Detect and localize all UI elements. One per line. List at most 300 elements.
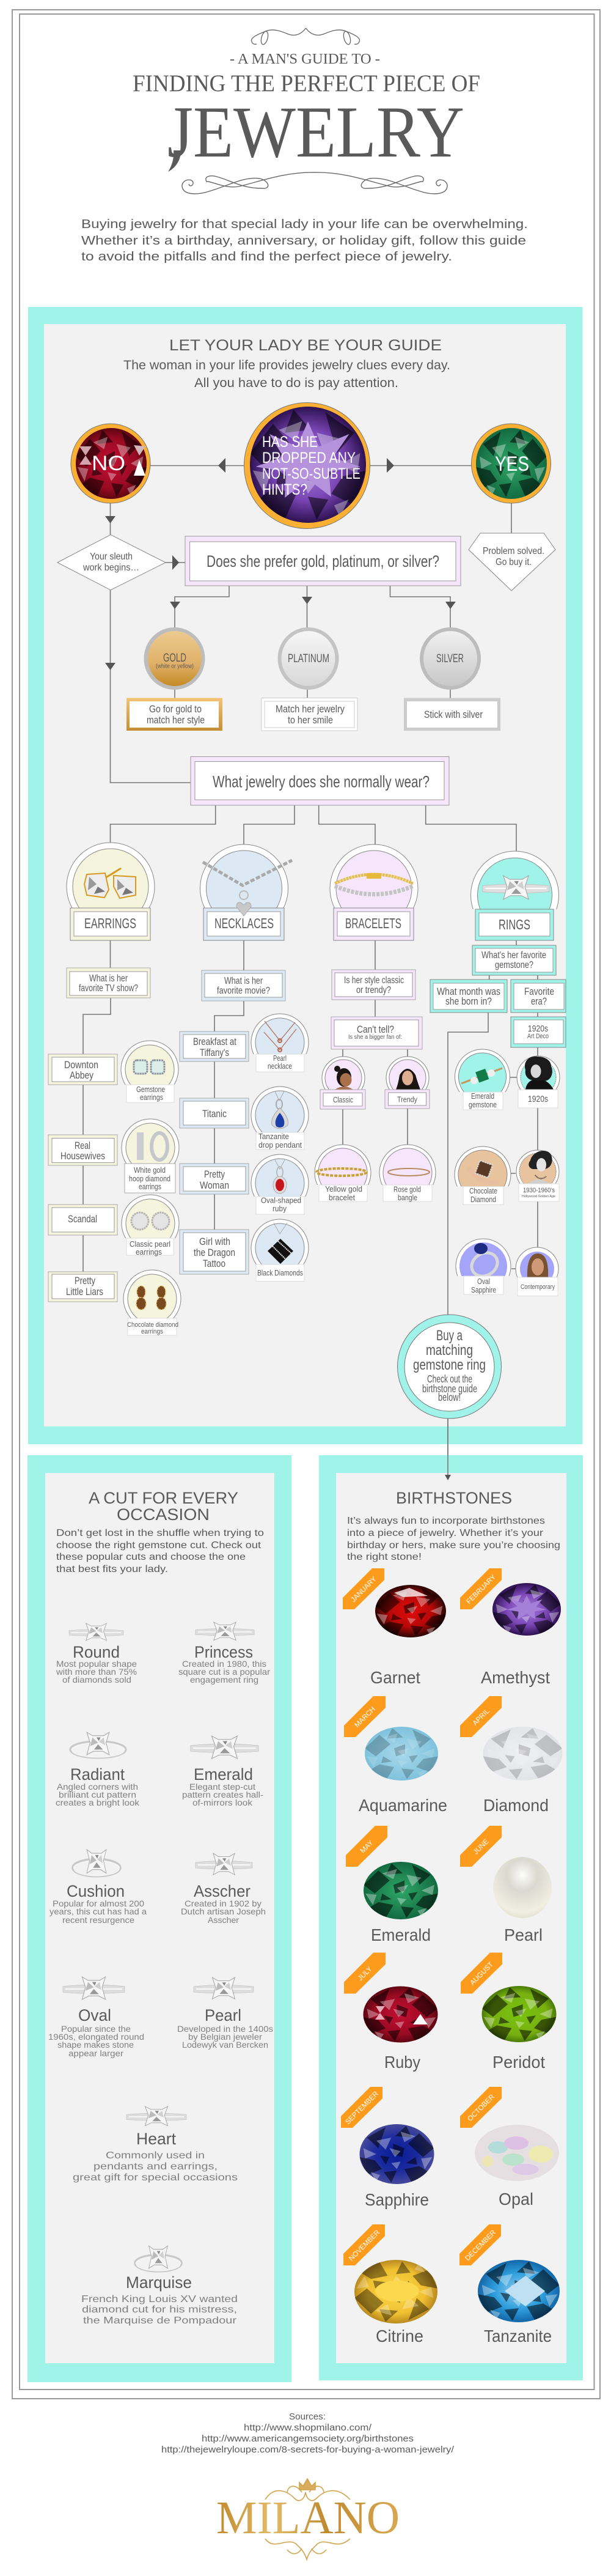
product: black diamonds <box>250 1219 310 1282</box>
month tag: JANUARY <box>350 1575 378 1604</box>
product: gemstone earrings <box>120 1041 180 1102</box>
question box: metal preference <box>185 536 461 586</box>
arrow: sleuth to question <box>172 555 179 570</box>
connector lines top flow <box>83 466 538 1477</box>
birthstone: tanzanite <box>459 2224 560 2345</box>
month tag <box>460 1696 502 1737</box>
cut: radiant: Angled corners with <box>57 1782 138 1792</box>
product: rose gold bangle: Rose gold <box>393 1185 421 1194</box>
option: platinum <box>262 627 357 731</box>
arrow: platinum <box>302 597 312 604</box>
arrow: main flow down <box>105 663 115 670</box>
category: earrings: EARRINGS <box>84 915 136 931</box>
birthstone: aquamarine <box>344 1696 447 1815</box>
product: chocolate earrings <box>122 1270 182 1335</box>
section heading: LET YOUR LADY BE YOUR GUIDE <box>169 337 442 354</box>
portrait: trendy <box>385 1057 430 1109</box>
category: necklaces: NECKLACES <box>214 915 274 931</box>
option: silver: Stick with silver <box>424 709 483 720</box>
cut: heart: Heart <box>136 2130 176 2148</box>
cut: pearl: Developed in the 1400s <box>177 2024 273 2034</box>
cut: radiant <box>56 1732 140 1807</box>
birthstones intro: birthday or hers, make sure you’re choosing <box>347 1540 560 1551</box>
cut: pearl: by Belgian jeweler <box>188 2032 262 2042</box>
product: chocolate earrings: Chocolate diamond <box>127 1321 178 1329</box>
cut: princess: Princess <box>194 1643 253 1661</box>
product: pearl earrings <box>120 1195 180 1257</box>
birthstones intro <box>347 1516 560 1562</box>
icon: emerald ring <box>461 1068 502 1084</box>
category: bracelets: BRACELETS <box>345 915 401 931</box>
answer: girl with the dragon tattoo: Tattoo <box>203 1258 225 1269</box>
cut: heart: pendants and earrings, <box>93 2161 218 2172</box>
icon: gold bracelet <box>316 1168 367 1176</box>
answer: downton abbey: Abbey <box>70 1069 93 1081</box>
month tag: JULY <box>357 1965 374 1982</box>
cut: marquise: French King Louis XV wanted <box>81 2294 238 2305</box>
product: chocolate diamond ring: Diamond <box>470 1195 496 1204</box>
month tag: AUGUST <box>469 1961 495 1987</box>
big circle: buy a matching gemstone ring: gemstone ring <box>413 1357 486 1373</box>
cut: heart <box>73 2106 238 2183</box>
big circle: buy a matching gemstone ring: matching <box>426 1342 473 1359</box>
answer: pretty little liars <box>48 1272 117 1302</box>
panel: birthstones <box>319 1455 583 2380</box>
portrait: 1920s <box>516 1056 561 1108</box>
option: platinum: PLATINUM <box>288 652 329 665</box>
question: cant tell <box>331 1017 422 1049</box>
top ornament <box>252 28 360 45</box>
section subtext: The woman in your life provides jewelry clues every day. <box>123 358 450 372</box>
big circle: buy a matching gemstone ring <box>397 1315 501 1419</box>
icon: 1920s woman <box>525 1057 554 1090</box>
intro paragraph: Buying jewelry for that special lady in your life can be overwhelming. <box>81 217 528 231</box>
cut intro: these popular cuts and choose the one <box>56 1552 246 1562</box>
cut: marquise: the Marquise de Pompadour <box>83 2316 237 2326</box>
question: birth month: What month was <box>437 986 500 997</box>
answer: girl with the dragon tattoo: the Dragon <box>194 1247 235 1258</box>
circle: hints question: HAS SHE <box>262 434 318 451</box>
cut heading: OCCASION <box>117 1505 210 1524</box>
panel: a cut for every occasion <box>27 1455 291 2382</box>
portrait: hollywood golden age <box>515 1150 560 1201</box>
crown flourish <box>265 2479 350 2501</box>
intro paragraph: to avoid the pitfalls and find the perfect piece of jewelry. <box>81 249 452 264</box>
cut: princess <box>178 1622 270 1685</box>
lower flourish <box>265 2539 350 2559</box>
cut: marquise: diamond cut for his mistress, <box>82 2305 237 2315</box>
cut intro: Don’t get lost in the shuffle when trying to <box>56 1528 264 1538</box>
product: yellow gold bracelet: bracelet <box>329 1194 355 1202</box>
icon: contemporary woman <box>527 1253 548 1277</box>
portrait: contemporary <box>514 1247 560 1296</box>
cut: emerald: Elegant step-cut <box>189 1782 255 1792</box>
cut: oval: shape makes stone <box>57 2040 134 2050</box>
cut: cushion: Popular for almost 200 <box>53 1899 144 1908</box>
circle: hints question: NOT-SO-SUBTLE <box>262 465 360 482</box>
product: yellow gold bracelet <box>313 1145 372 1202</box>
gem shape: problem solved: Problem solved. <box>483 546 544 556</box>
portrait: hollywood golden age: Hollywood Golden Age <box>522 1195 555 1198</box>
circle: no <box>71 424 150 503</box>
icon: hoops <box>137 1132 167 1160</box>
cut: asscher: Created in 1902 by <box>185 1899 262 1908</box>
birthstone: emerald: Emerald <box>371 1925 431 1944</box>
question: style: Is her style classic <box>344 975 404 986</box>
arrow: silver <box>445 602 456 609</box>
product: oval sapphire ring: Oval <box>477 1277 490 1286</box>
cut: oval: appear larger <box>68 2048 123 2058</box>
arrow: to yes <box>387 458 394 473</box>
icon: heart necklace <box>203 860 292 916</box>
birthstone: diamond: Diamond <box>483 1796 549 1815</box>
answer: pretty woman <box>180 1164 249 1194</box>
cut: princess: Created in 1980, this <box>182 1659 266 1669</box>
question: style <box>332 970 415 1000</box>
cut: cushion <box>49 1850 147 1925</box>
circle: no: NO <box>92 452 125 475</box>
option: silver: SILVER <box>436 652 464 665</box>
cut: heart: great gift for special occasions <box>73 2172 238 2183</box>
circle: hints question: HINTS? <box>262 481 307 498</box>
answer: girl with the dragon tattoo: Girl with <box>199 1236 230 1247</box>
question box: metal preference: Does she prefer gold, platinum, or silver? <box>207 552 439 570</box>
birthstone: pearl: Pearl <box>504 1925 543 1944</box>
circle: hints question: DROPPED ANY <box>262 449 356 467</box>
sources <box>161 2412 455 2455</box>
answer: breakfast at tiffanys <box>180 1032 249 1061</box>
option: gold: GOLD <box>163 652 186 665</box>
flow line into birthstones panel <box>445 1419 451 1480</box>
cut: radiant: brilliant cut pattern <box>59 1790 136 1799</box>
birthstone: amethyst <box>460 1568 561 1687</box>
birthstones intro: the right stone! <box>347 1552 422 1562</box>
category: earrings <box>64 843 157 940</box>
question: movie: favorite movie? <box>217 986 270 996</box>
product: emerald ring: Emerald <box>471 1092 494 1101</box>
cut: heart: Commonly used in <box>106 2150 205 2161</box>
answer: downton abbey: Downton <box>64 1059 98 1071</box>
cut: asscher <box>181 1853 266 1925</box>
question box: what jewelry: What jewelry does she normally wear? <box>213 773 430 791</box>
icon: woman with long hair <box>396 1069 420 1090</box>
month tag: OCTOBER <box>466 2093 496 2123</box>
icon: ruby pendant <box>273 1160 287 1194</box>
portrait: classic <box>320 1057 366 1109</box>
big circle: buy a matching gemstone ring: below! <box>438 1391 461 1403</box>
question: gemstone: What's her favorite <box>481 950 546 961</box>
question: movie <box>202 970 285 1001</box>
cut: emerald: of-mirrors look <box>192 1798 253 1807</box>
icon: bangle <box>388 1168 430 1176</box>
icon: 1950s woman <box>528 1151 552 1184</box>
portrait: trendy: Trendy <box>397 1094 417 1104</box>
product: pearl earrings: earrings <box>136 1248 162 1257</box>
birthstone: garnet: Garnet <box>370 1668 420 1687</box>
birthstone: ruby <box>344 1953 437 2072</box>
birthstone: diamond <box>460 1696 562 1815</box>
month tag <box>459 2224 501 2265</box>
cut: cushion: Cushion <box>67 1882 125 1900</box>
portrait: 1920s: 1920s <box>528 1094 548 1104</box>
cut: emerald <box>182 1736 263 1807</box>
birthstone: garnet <box>343 1568 446 1687</box>
cut: pearl: Pearl <box>205 2006 241 2024</box>
diamond: sleuth work: Your sleuth <box>90 552 133 562</box>
option: gold: match her style <box>147 714 205 726</box>
month tag <box>460 1568 502 1609</box>
cut: asscher: Asscher <box>194 1882 251 1900</box>
cut: princess: engagement ring <box>190 1675 258 1685</box>
icon: pearl studs <box>131 1212 169 1230</box>
month tag <box>344 1696 386 1737</box>
question: birth month: she born in? <box>445 995 492 1007</box>
icon: solitaire ring <box>483 876 549 899</box>
product: pearl earrings: Classic pearl <box>130 1240 170 1249</box>
product: tanzanite pendant: Tanzanite <box>258 1132 289 1141</box>
answer: pretty little liars: Little Liars <box>66 1286 103 1297</box>
cut heading <box>89 1489 238 1524</box>
cut: oval: Popular since the <box>61 2024 131 2034</box>
cut: round: Round <box>73 1643 120 1661</box>
question: favorite era: era? <box>531 995 547 1007</box>
icon: woman with bun <box>334 1066 353 1090</box>
icon: chocolate ring <box>468 1161 499 1183</box>
cut: round: of diamonds sold <box>62 1675 131 1685</box>
big circle: buy a matching gemstone ring: Check out the <box>427 1373 472 1385</box>
option: gold: Go for gold to <box>149 703 202 715</box>
question: cant tell: Can't tell? <box>357 1024 394 1035</box>
birthstone: amethyst: Amethyst <box>481 1668 550 1687</box>
title <box>133 51 480 172</box>
question: tv show: What is her <box>89 973 128 984</box>
section subtext <box>123 358 450 390</box>
question: favorite era: Favorite <box>524 986 554 997</box>
month tag: APRIL <box>472 1707 491 1727</box>
birthstone: emerald <box>346 1826 438 1944</box>
icon: halo studs <box>134 1060 164 1074</box>
answer: titanic: Titanic <box>202 1108 227 1120</box>
product: hoop earrings: earrings <box>139 1183 161 1191</box>
circle: yes: YES <box>495 452 529 476</box>
month tag <box>343 1568 384 1609</box>
cut: princess: square cut is a popular <box>178 1667 270 1677</box>
intro paragraph <box>81 217 528 264</box>
product: black diamonds: Black Diamonds <box>257 1269 303 1277</box>
answer: breakfast at tiffanys: Tiffany's <box>200 1047 229 1058</box>
product: pearl necklace: Pearl <box>273 1054 287 1063</box>
product: hoop earrings: White gold <box>134 1166 166 1175</box>
cut: round <box>56 1623 137 1685</box>
big circle: buy a matching gemstone ring: Buy a <box>436 1327 463 1344</box>
logo: milano: MILANO <box>216 2492 400 2544</box>
cut: oval: 1960s, elongated round <box>48 2032 144 2042</box>
product: chocolate earrings: earrings <box>141 1328 163 1335</box>
icon: sapphire ring <box>467 1243 502 1281</box>
category: bracelets <box>329 844 419 940</box>
product: ruby pendant <box>250 1154 310 1214</box>
month tag <box>460 1826 502 1867</box>
birthstone: tanzanite: Tanzanite <box>484 2327 552 2345</box>
month tag <box>461 1953 502 1993</box>
option: gold: (white or yellow) <box>156 663 194 670</box>
birthstone: citrine: Citrine <box>376 2327 423 2345</box>
option: gold <box>126 627 222 731</box>
birthstone: peridot: Peridot <box>492 2053 545 2072</box>
product: gemstone earrings: Gemstone <box>136 1085 165 1094</box>
month tag: DECEMBER <box>464 2229 497 2262</box>
panel: let your lady be your guide <box>28 307 583 1477</box>
birthstone: opal <box>460 2087 559 2209</box>
icon: drop pendant <box>272 1091 288 1129</box>
arrow: gold <box>170 602 180 609</box>
question: tv show <box>67 968 150 998</box>
era box: 1920s art deco: Art Deco <box>527 1033 549 1040</box>
option: platinum: Match her jewelry <box>276 703 345 715</box>
month tag: MAY <box>359 1839 375 1854</box>
portrait: hollywood golden age: 1930-1960's <box>523 1187 555 1194</box>
portrait: classic: Classic <box>333 1095 353 1104</box>
big word: JEWELRY <box>167 91 464 172</box>
cut intro: choose the right gemstone cut. Check out <box>56 1540 262 1551</box>
birthstones heading: BIRTHSTONES <box>396 1489 512 1507</box>
category: necklaces <box>199 844 292 940</box>
option: platinum: to her smile <box>288 714 333 726</box>
eyebrow: - A MAN'S GUIDE TO - <box>230 51 380 67</box>
answer: pretty little liars: Pretty <box>75 1275 95 1286</box>
icon: pendant chains <box>264 1021 296 1052</box>
question: style: or trendy? <box>356 985 391 995</box>
product: chocolate diamond ring <box>453 1146 512 1205</box>
cut: round: Most popular shape <box>56 1659 137 1669</box>
headline line: FINDING THE PERFECT PIECE OF <box>133 70 480 97</box>
month tag <box>346 1826 387 1867</box>
icon: chocolate earrings <box>136 1286 166 1310</box>
intro paragraph: Whether it’s a birthday, anniversary, or holiday gift, follow this guide <box>81 234 526 248</box>
product: tanzanite pendant <box>250 1087 310 1150</box>
product: rose gold bangle <box>378 1145 437 1202</box>
birthstone: pearl <box>460 1826 552 1944</box>
cut: oval <box>48 1977 144 2058</box>
sources: Sources: <box>289 2412 326 2422</box>
cut: radiant: Radiant <box>70 1765 125 1784</box>
cut: emerald: pattern creates hall- <box>182 1790 263 1799</box>
question: birth month <box>430 980 507 1013</box>
cut: pearl <box>177 1977 273 2050</box>
product: oval sapphire ring: Sapphire <box>471 1286 496 1294</box>
month tag: NOVEMBER <box>348 2229 381 2262</box>
product: tanzanite pendant: drop pendant <box>258 1141 302 1150</box>
circle: yes <box>472 424 551 503</box>
section subtext: All you have to do is pay attention. <box>194 376 398 390</box>
answer: scandal <box>48 1205 117 1235</box>
product: yellow gold bracelet: Yellow gold <box>325 1185 362 1194</box>
product: hoop earrings: hoop diamond <box>129 1175 170 1183</box>
option: silver <box>404 627 500 731</box>
birthstones intro: into a piece of jewelry. Whether it’s your <box>347 1528 544 1538</box>
arrow: to no <box>218 458 225 473</box>
logo: milano <box>216 2479 400 2559</box>
product: hoop earrings <box>120 1119 180 1193</box>
icon: tennis bracelet <box>335 873 413 894</box>
birthstones intro: It’s always fun to incorporate birthstones <box>347 1516 545 1526</box>
product: ruby pendant: Oval-shaped <box>261 1196 301 1205</box>
product: chocolate diamond ring: Chocolate <box>469 1187 497 1195</box>
sources: http://www.shopmilano.com/ <box>244 2423 372 2433</box>
birthstone: citrine <box>343 2224 437 2345</box>
birthstone: ruby: Ruby <box>384 2053 420 2072</box>
gem shape: problem solved: Go buy it. <box>496 557 532 567</box>
month tag <box>344 1953 386 1993</box>
gem shape: problem solved <box>469 533 555 591</box>
answer: girl with the dragon tattoo <box>180 1230 249 1274</box>
cut: oval: Oval <box>78 2006 111 2024</box>
birthstone: opal: Opal <box>499 2190 533 2209</box>
cut intro: that best fits your lady. <box>56 1564 168 1574</box>
cut: cushion: recent resurgence <box>62 1915 134 1925</box>
answer: titanic <box>180 1098 249 1128</box>
cut: radiant: creates a bright look <box>56 1798 140 1807</box>
cut: marquise: Marquise <box>126 2273 192 2292</box>
month tag <box>343 2224 385 2265</box>
J descender tail <box>168 150 181 172</box>
cut: asscher: Dutch artisan Joseph <box>181 1906 266 1916</box>
product: pearl necklace <box>250 1014 310 1072</box>
cut: round: with more than 75% <box>56 1667 137 1677</box>
cut: asscher: Asscher <box>208 1915 239 1925</box>
cut: marquise <box>81 2246 238 2326</box>
answer: breakfast at tiffanys: Breakfast at <box>193 1036 236 1047</box>
birthstone: peridot <box>461 1953 556 2072</box>
product: oval sapphire ring <box>455 1239 512 1294</box>
month tag <box>460 2087 502 2128</box>
answer: pretty woman: Pretty <box>204 1168 225 1180</box>
big circle: buy a matching gemstone ring: birthstone guide <box>422 1382 477 1395</box>
sources: http://www.americangemsociety.org/birthstones <box>202 2434 414 2444</box>
arrow: no down <box>105 516 115 523</box>
question box: what jewelry <box>191 757 449 805</box>
month tag: JUNE <box>472 1838 491 1856</box>
answer: pretty woman: Woman <box>200 1179 229 1191</box>
answer: downton abbey <box>48 1054 117 1085</box>
category: rings <box>469 851 561 940</box>
answer: real housewives: Housewives <box>60 1150 105 1162</box>
month tag: SEPTEMBER <box>344 2090 380 2126</box>
portrait: contemporary: Contemporary <box>521 1283 555 1291</box>
cut heading: A CUT FOR EVERY <box>89 1489 238 1507</box>
circle: hints question <box>244 402 370 528</box>
category: rings: RINGS <box>499 917 530 932</box>
product: emerald ring <box>453 1049 511 1110</box>
product: rose gold bangle: bangle <box>398 1194 417 1202</box>
product: emerald ring: gemstone <box>469 1101 497 1109</box>
sources: http://thejewelryloupe.com/8-secrets-for-buying-a-woman-jewelry/ <box>161 2445 455 2455</box>
product: gemstone earrings: earrings <box>140 1093 163 1102</box>
icon: stud earrings <box>84 868 136 898</box>
cut intro <box>56 1528 264 1574</box>
era box: 1920s art deco <box>511 1017 566 1047</box>
diamond: sleuth work <box>57 534 166 590</box>
product: ruby pendant: ruby <box>273 1205 287 1213</box>
question: gemstone <box>472 945 556 975</box>
cut: cushion: years, this cut has had a <box>49 1906 147 1916</box>
product: pearl necklace: necklace <box>268 1062 292 1071</box>
era box: 1920s art deco: 1920s <box>528 1024 548 1034</box>
birthstone: sapphire <box>341 2087 434 2209</box>
question: tv show: favorite TV show? <box>79 983 138 994</box>
answer: real housewives <box>48 1135 117 1165</box>
cut: pearl: Lodewyk van Bercken <box>182 2040 268 2050</box>
